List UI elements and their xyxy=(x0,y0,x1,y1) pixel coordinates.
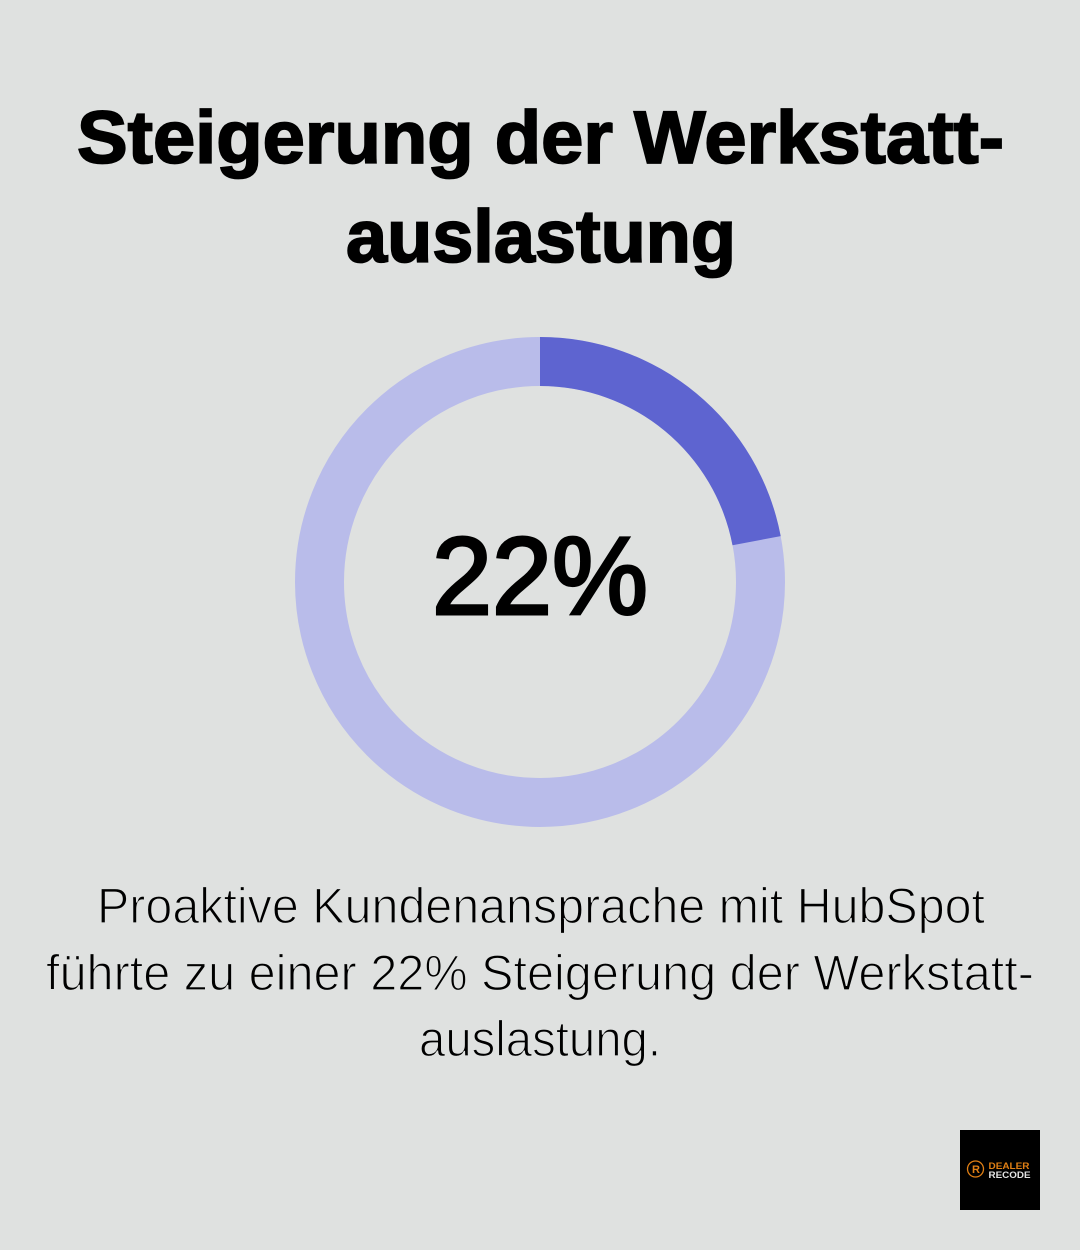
donut value: 22% xyxy=(432,515,648,638)
description text xyxy=(46,878,1034,1067)
logo: Dealer Recode: R xyxy=(972,1164,980,1176)
description text: führte zu einer 22% Steigerung der Werkstatt- xyxy=(46,945,1034,1001)
description text: Proaktive Kundenansprache mit HubSpot xyxy=(97,878,985,934)
title: Steigerung der Werkstatt- xyxy=(77,96,1004,179)
title: auslastung xyxy=(346,195,736,278)
logo: Dealer Recode: RECODE xyxy=(988,1170,1030,1181)
donut chart: 22% xyxy=(320,337,781,802)
title xyxy=(77,96,1004,278)
description text: auslastung. xyxy=(419,1011,661,1067)
logo: Dealer Recode: DEALER xyxy=(988,1161,1030,1172)
logo: Dealer Recode xyxy=(960,1130,1040,1210)
